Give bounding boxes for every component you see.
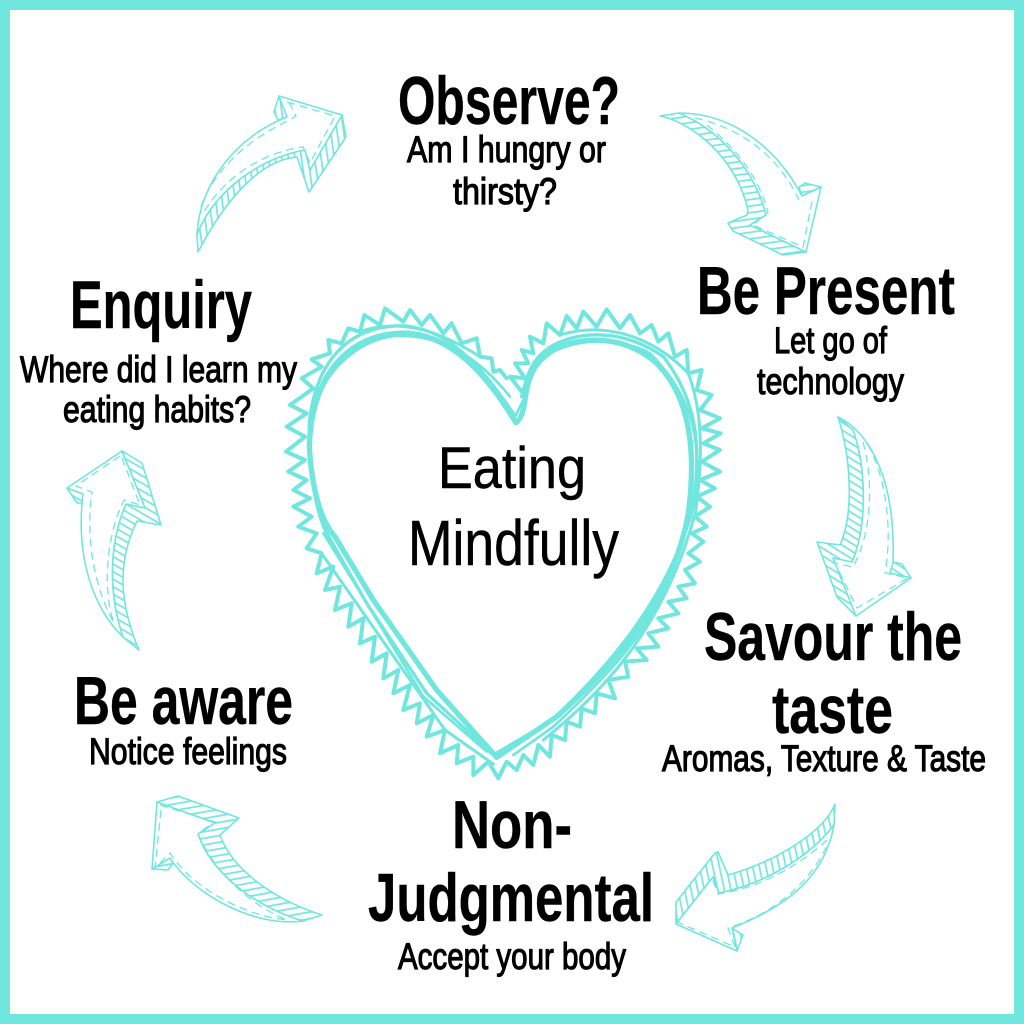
arrow: non-judgmental to be aware [152, 796, 322, 922]
arrow: be aware to enquiry [67, 451, 161, 650]
step: be aware [74, 663, 293, 772]
step: non-judgmental: Accept your body [398, 936, 626, 977]
heart outline strokes [309, 326, 697, 757]
teeth base lines [322, 326, 700, 764]
center title: Eating [438, 436, 586, 501]
step: enquiry: Enquiry [70, 267, 252, 343]
step: observe: Observe? [398, 63, 620, 139]
step: be aware: Be aware [74, 663, 293, 739]
center title: Mindfully [408, 507, 619, 579]
step: be aware: Notice feelings [89, 731, 287, 772]
step: non-judgmental: Judgmental [368, 860, 654, 936]
step: be present: technology [757, 361, 904, 402]
step: observe: Am I hungry or [407, 129, 606, 170]
arrow: observe to be present [660, 113, 821, 255]
step: be present: Let go of [774, 320, 888, 361]
zigzag teeth [286, 308, 721, 778]
arrow: savour to non-judgmental [676, 804, 835, 951]
arrow: be present to savour [817, 417, 911, 616]
step: observe [398, 63, 620, 212]
center title [408, 436, 619, 579]
step: non-judgmental: Non- [452, 787, 572, 863]
step: enquiry: eating habits? [63, 389, 251, 430]
step: non-judgmental [368, 787, 654, 977]
step: savour the taste: taste [772, 672, 893, 748]
step: observe: thirsty? [453, 171, 557, 212]
arrow: enquiry to observe [197, 96, 346, 252]
heart with zigzag border [286, 308, 721, 778]
step: be present [697, 253, 955, 402]
step: enquiry [20, 267, 297, 430]
step: savour the taste [662, 599, 986, 779]
step: enquiry: Where did I learn my [20, 349, 297, 390]
